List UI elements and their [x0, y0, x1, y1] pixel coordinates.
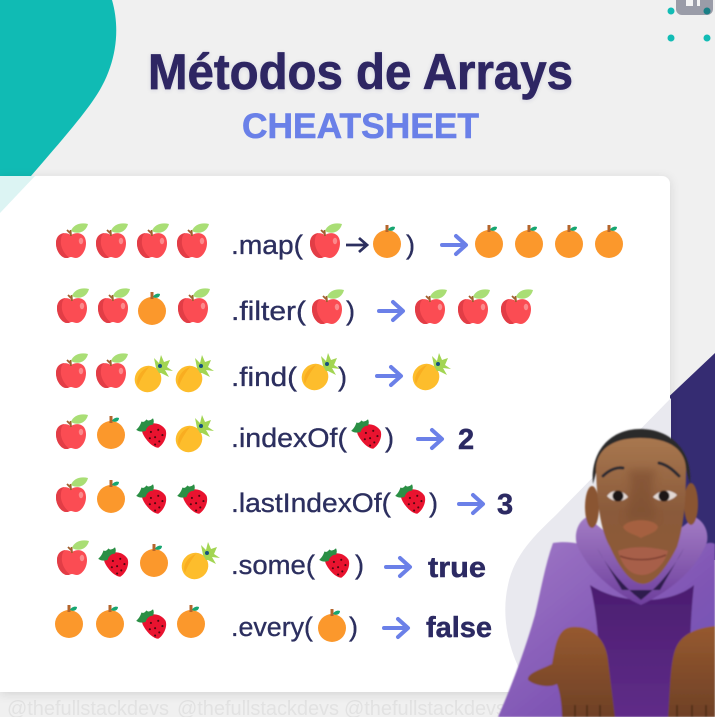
method argument: [319, 548, 364, 580]
right hand fingers: [677, 705, 706, 717]
method name: .filter(: [231, 296, 306, 326]
method argument: [296, 353, 347, 396]
result: 3: [497, 489, 513, 521]
method name: .indexOf(: [231, 423, 347, 453]
input fruits: [55, 605, 205, 639]
method name: .lastIndexOf(: [231, 488, 391, 518]
result fruits: [415, 289, 533, 324]
method argument: ): [406, 230, 415, 260]
method argument: ): [385, 423, 394, 453]
arrow: [418, 430, 442, 448]
input fruits: [57, 288, 210, 325]
input fruits: [57, 540, 220, 585]
method name: .map(: [231, 230, 303, 260]
subtitle: CHEATSHEET: [242, 107, 479, 146]
arrow: [377, 367, 401, 385]
method argument: ): [355, 550, 364, 580]
hoodie sleeves: [498, 542, 715, 717]
mouth: [618, 547, 668, 575]
eyes: [607, 490, 677, 502]
grey blob behind character: [505, 398, 671, 692]
teal corner shape: [0, 0, 116, 176]
method argument: ): [429, 488, 438, 518]
right hand: [668, 626, 715, 717]
method argument: ): [346, 296, 355, 326]
method argument: [395, 484, 438, 518]
method argument: [318, 609, 358, 642]
ears: [585, 483, 698, 528]
hood: [576, 517, 707, 605]
input fruits: [56, 414, 214, 458]
row: find: [56, 353, 451, 398]
input fruits: [56, 353, 214, 398]
result fruit: [407, 353, 451, 396]
row: map: [56, 223, 623, 260]
row: some: [57, 540, 486, 585]
navy corner shape: [660, 353, 715, 560]
light teal shape: [0, 176, 35, 213]
method argument: ): [338, 362, 347, 392]
left hand fingers: [575, 705, 600, 717]
method argument: ): [349, 612, 358, 642]
method argument: [310, 223, 415, 260]
arrow: [442, 236, 466, 254]
arrow: [379, 302, 403, 320]
panel: cheatsheet card: [0, 176, 670, 692]
result fruits: [475, 225, 623, 258]
row: lastIndexOf: [56, 477, 513, 521]
method argument: [351, 419, 394, 453]
arrow: [459, 495, 483, 513]
input fruits: [56, 223, 209, 258]
hoodie torso: [590, 585, 694, 717]
lip line: [620, 555, 666, 560]
character illustration: [498, 429, 715, 717]
method name: .find(: [231, 362, 297, 392]
top-right dot grid: [668, 0, 713, 42]
row: every: [55, 605, 492, 644]
face: [596, 438, 686, 584]
row: indexOf: [56, 414, 474, 458]
arrow: [384, 619, 408, 637]
watermark: [7, 698, 506, 717]
result: 2: [458, 424, 474, 456]
method argument: [312, 289, 355, 326]
left hand: [528, 627, 615, 717]
result: true: [428, 552, 486, 584]
method name: .some(: [231, 550, 315, 580]
eyebrows: [603, 463, 679, 476]
input fruits: [56, 477, 207, 514]
row: filter: [57, 288, 533, 326]
hair: [593, 429, 690, 484]
result: false: [426, 612, 492, 644]
arrow: [386, 558, 410, 576]
method name: .every(: [231, 612, 313, 642]
title: Métodos de Arrays: [148, 44, 573, 100]
nose bridge: [626, 470, 656, 520]
nose: [623, 520, 658, 538]
hood inner shadow: [597, 548, 684, 600]
